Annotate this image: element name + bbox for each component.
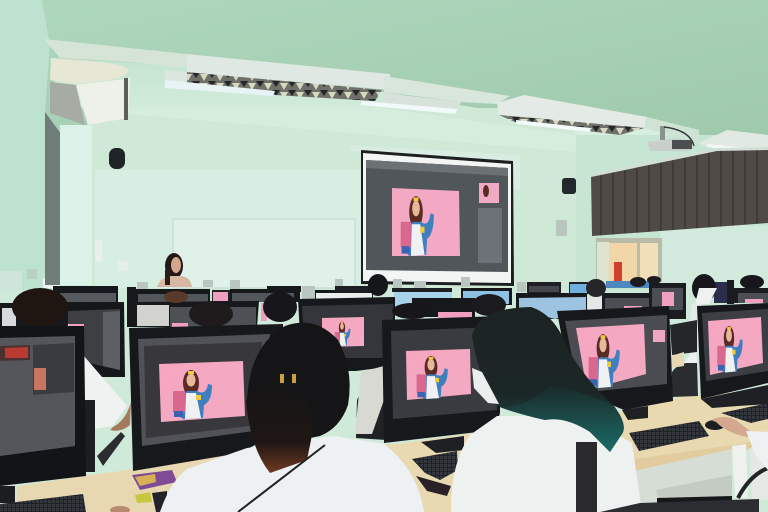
chair right [672, 362, 698, 397]
ceiling light 3 [699, 130, 768, 155]
monitor front centre [382, 316, 500, 453]
ceiling light middle [361, 93, 461, 114]
ceiling beam middle [384, 76, 510, 104]
monitors centre right rear [392, 294, 506, 319]
whiteboard [173, 219, 355, 288]
second row students [164, 291, 297, 327]
hand at right [705, 417, 768, 470]
ceiling projector [647, 126, 694, 151]
keyboards [152, 403, 768, 512]
beam right [644, 117, 699, 143]
speaker right [562, 178, 576, 194]
speaker left [109, 148, 125, 169]
ceiling beam [44, 39, 187, 68]
shirt far back right [684, 346, 697, 363]
phone [416, 476, 451, 496]
back row students [368, 274, 764, 340]
projector screen [350, 145, 520, 286]
under-table area right [634, 444, 768, 506]
chair front [600, 499, 759, 512]
ceiling light 1 [165, 54, 390, 101]
back row monitors [53, 280, 768, 327]
hand lower left [110, 506, 130, 512]
teacher [157, 253, 192, 287]
keyboard far left [0, 494, 86, 512]
wall switch [95, 240, 102, 262]
front student right [451, 307, 642, 512]
monitor middle rear centre [298, 297, 395, 371]
student in left rear [0, 288, 131, 472]
left wall [0, 0, 50, 290]
monitor far left [0, 326, 86, 503]
table front [16, 391, 768, 512]
monitor far right [697, 303, 768, 408]
chair back middle [356, 388, 386, 440]
shirt behind middle monitor [355, 366, 384, 434]
monitor front centre left [129, 324, 283, 471]
curtain [588, 147, 768, 236]
front student left [160, 323, 424, 512]
thermostat [118, 261, 128, 271]
back door [596, 238, 662, 282]
air conditioner [50, 58, 130, 125]
monitor right centre [557, 306, 673, 420]
table sliver right [671, 352, 684, 368]
ceiling light 2 [497, 95, 647, 135]
monitor second row centre rear left [135, 301, 267, 327]
doorway left [45, 112, 92, 285]
keyboards back right [670, 320, 697, 355]
snack packet [132, 470, 177, 503]
left door panel [0, 269, 60, 291]
wall box [556, 220, 567, 236]
desk items on far row [137, 277, 526, 299]
